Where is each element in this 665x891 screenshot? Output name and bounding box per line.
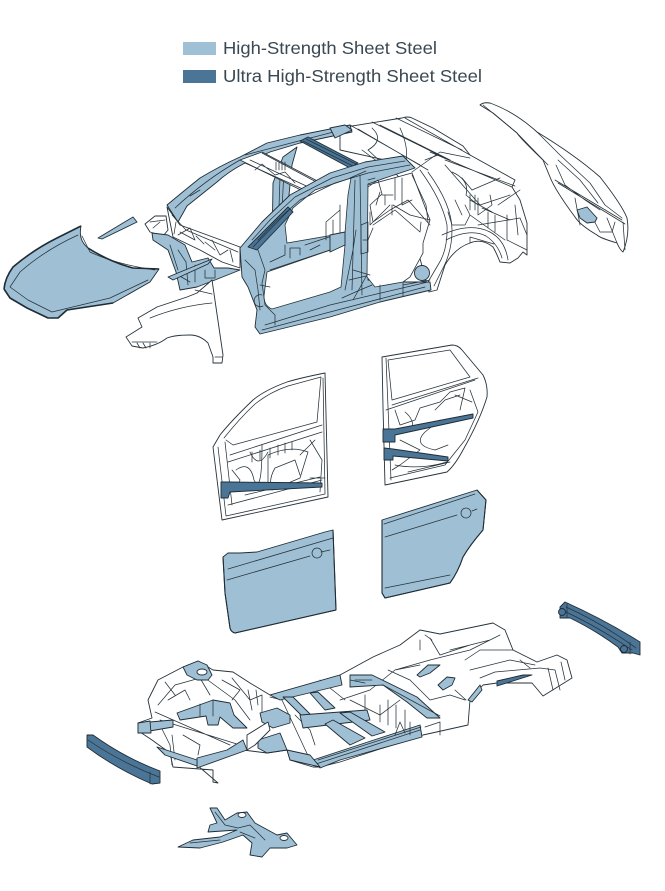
- lower rail: [197, 740, 247, 768]
- front door inner frame: [213, 373, 328, 520]
- rear door lower impact beam: [384, 448, 448, 461]
- front door impact beam: [221, 482, 322, 498]
- rear door opening: [367, 173, 430, 287]
- rear door upper impact beam: [383, 414, 473, 442]
- fender: [126, 280, 223, 363]
- front bumper reinforcement: [87, 735, 160, 784]
- upper window opening: [285, 178, 351, 243]
- legend label: ultra high-strength: Ultra High-Strength Sheet Steel: [223, 66, 482, 86]
- rear hatch: [480, 103, 628, 252]
- rear door outer panel: [382, 490, 486, 598]
- A-pillar lower detail: [245, 235, 335, 325]
- legend: [183, 38, 482, 86]
- fender bar: [168, 259, 212, 280]
- legend swatch: high-strength: [183, 42, 216, 55]
- roof rail lines: [252, 161, 430, 330]
- near A-pillar ultra high-strength reinforcement: [248, 207, 293, 250]
- underbody: [138, 623, 572, 783]
- far-side A-pillar and roof rail: [167, 125, 352, 222]
- second roof bar: [330, 125, 352, 138]
- windshield header (white): [240, 152, 325, 193]
- front rail upper: [177, 700, 247, 728]
- engine subframe: [178, 808, 297, 857]
- front stub: [138, 720, 173, 733]
- far sill and floor rails: [270, 675, 342, 700]
- roof bar ultra high-strength: [300, 137, 358, 168]
- strut tower: [183, 661, 212, 680]
- front door outer panel: [223, 530, 336, 633]
- roof and rear quarter (white): [340, 117, 527, 292]
- front strut tower: [145, 216, 168, 236]
- front crossmember mount: [260, 708, 290, 728]
- cowl panel (white): [167, 207, 240, 268]
- far-side B-pillar: [272, 147, 297, 250]
- legend label: high-strength: High-Strength Sheet Steel: [223, 38, 437, 58]
- band panel in opening: [330, 232, 345, 252]
- hood: [4, 226, 159, 318]
- legend swatch: ultra high-strength: [183, 70, 216, 83]
- underbody white floor outline: [138, 623, 572, 783]
- near-side frame: [240, 156, 431, 334]
- lower door opening: [264, 245, 345, 309]
- rear bumper reinforcement: [558, 602, 640, 655]
- hood seal strip: [98, 217, 137, 239]
- rear wheel bump: [414, 266, 430, 280]
- rear door inner frame: [382, 345, 487, 485]
- front apron: [152, 233, 240, 290]
- body side structure: [145, 117, 527, 334]
